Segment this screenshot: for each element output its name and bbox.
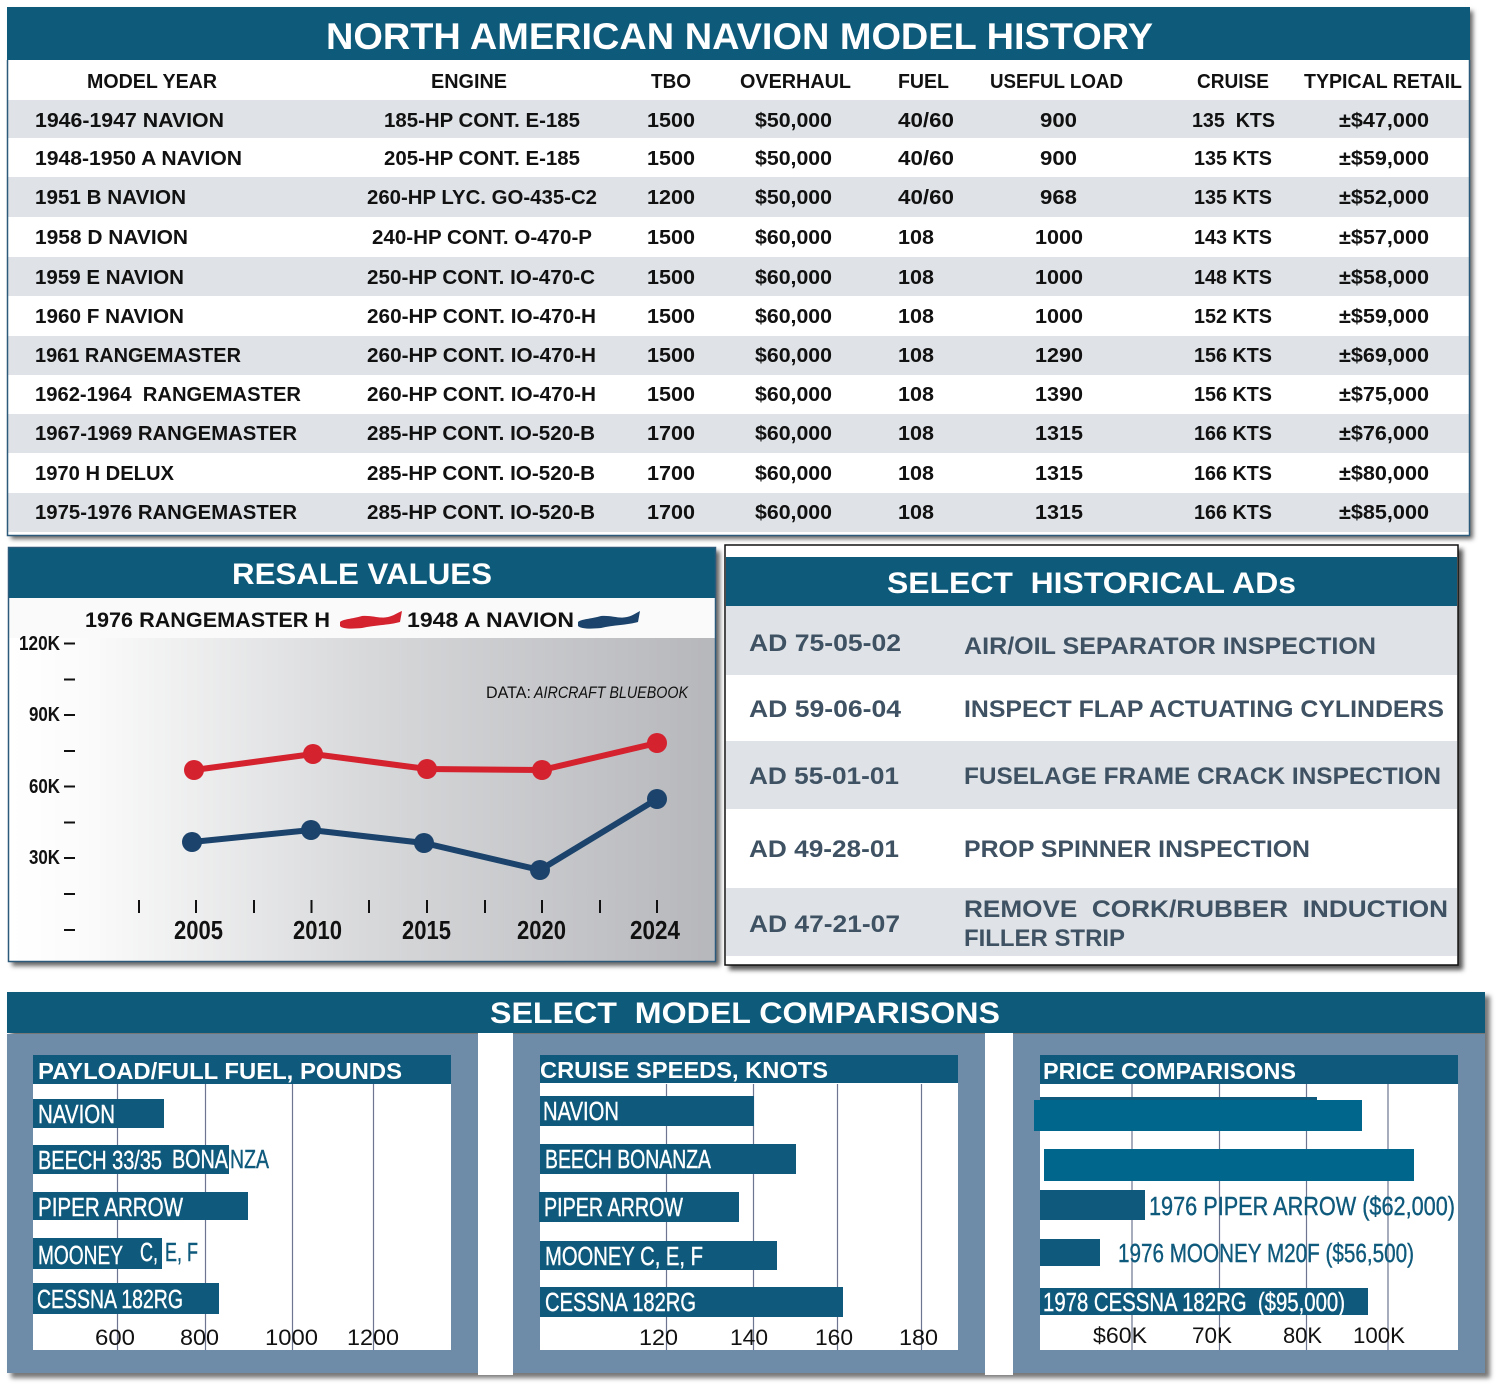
table row: 1951 B Navion: $50,000	[755, 186, 832, 209]
table row: 1946-1947 Navion	[8, 100, 1469, 138]
table row: 1962-1964 Rangemaster: $60,000	[755, 383, 832, 406]
table row: 1948-1950 A Navion: 1500	[647, 147, 695, 170]
cruise axis labels	[639, 1325, 938, 1350]
bar: 1976 Mooney M20F price	[1040, 1239, 1414, 1268]
table row: 1967-1969 Rangemaster: 285-HP CONT. IO-520-B	[367, 422, 595, 445]
table row: 1960 F Navion: 1500	[647, 305, 695, 328]
panel: price comparison chart	[1013, 1034, 1485, 1373]
panel: select historical ADs	[725, 545, 1463, 970]
data source note: DATA:	[486, 683, 531, 702]
panel: payload chart	[7, 1034, 478, 1373]
x axis: 2024	[630, 915, 680, 945]
payload axis labels: 600	[95, 1325, 135, 1350]
bar: Navion payload: NAVION	[38, 1101, 115, 1129]
resale values heading: RESALE VALUES	[232, 558, 492, 591]
bar: Beech Bonanza payload: BEECH 33/35	[38, 1147, 162, 1175]
bar: Mooney payload	[33, 1238, 198, 1270]
table row: 1946-1947 Navion: 900	[1040, 109, 1077, 132]
table row: 1970 H Delux: ±$80,000	[1339, 462, 1429, 485]
comparisons heading: SELECT MODEL COMPARISONS	[490, 997, 1000, 1030]
table row: 1951 B Navion	[8, 177, 1469, 217]
bar: Beech Bonanza payload: BONA	[172, 1146, 228, 1174]
cruise heading	[540, 1055, 958, 1083]
legend: 1976 RANGEMASTER H	[85, 609, 330, 632]
table row: 1970 H Delux: 1970 H DELUX	[35, 462, 174, 485]
panel: cruise speed chart	[513, 1034, 985, 1373]
table row: 1967-1969 Rangemaster: 108	[898, 422, 934, 445]
table row: 1958 D Navion: $60,000	[755, 226, 832, 249]
payload axis labels: 1000	[265, 1325, 318, 1350]
table row: 1959 E Navion: ±$58,000	[1339, 266, 1429, 289]
AD row: 75-05-02	[726, 606, 1457, 675]
AD row: 55-01-01	[726, 741, 1457, 809]
table row: 1959 E Navion: 250-HP CONT. IO-470-C	[367, 266, 595, 289]
table row: 1961 Rangemaster: ±$69,000	[1339, 344, 1429, 367]
table row: 1967-1969 Rangemaster: 1967-1969 RANGEMASTER	[35, 422, 297, 445]
table row: 1960 F Navion: 108	[898, 305, 934, 328]
table row: 1961 Rangemaster: 156 KTS	[1194, 344, 1272, 367]
table row: 1967-1969 Rangemaster: ±$76,000	[1339, 422, 1429, 445]
table column headers: ENGINE	[431, 70, 507, 93]
table row: 1960 F Navion: 1000	[1035, 305, 1083, 328]
table row: 1948-1950 A Navion: 135 KTS	[1194, 147, 1272, 170]
table row: 1958 D Navion: 1500	[647, 226, 695, 249]
bar: 1976 Piper Arrow price: 1976 PIPER ARROW ($62,000)	[1149, 1193, 1455, 1221]
AD row: 75-05-02: AIR/OIL SEPARATOR INSPECTION	[964, 633, 1376, 660]
table row: 1960 F Navion: $60,000	[755, 305, 832, 328]
bar: Cessna cruise: CESSNA 182RG	[545, 1289, 696, 1317]
table row: 1951 B Navion: 1200	[647, 186, 695, 209]
AD row: 49-28-01	[749, 836, 1310, 863]
table row: 1967-1969 Rangemaster: $60,000	[755, 422, 832, 445]
table row: 1970 H Delux: 108	[898, 462, 934, 485]
table row: 1961 Rangemaster: 108	[898, 344, 934, 367]
table row: 1951 B Navion: 135 KTS	[1194, 186, 1272, 209]
bar: 1976 Mooney M20F price: 1976 MOONEY M20F ($56,500)	[1118, 1240, 1414, 1268]
AD row: 49-28-01: AD 49-28-01	[749, 836, 899, 863]
x axis	[139, 900, 680, 945]
table row: 1948-1950 A Navion: $50,000	[755, 147, 832, 170]
title bar	[7, 7, 1470, 60]
table row: 1946-1947 Navion: 185-HP CONT. E-185	[384, 109, 580, 132]
table row: 1975-1976 Rangemaster: $60,000	[755, 501, 832, 524]
bar: 1978 Cessna 182RG price: 1978 CESSNA 182RG ($95,000)	[1043, 1289, 1345, 1317]
price axis labels	[1093, 1323, 1405, 1348]
table row: 1961 Rangemaster: 1961 RANGEMASTER	[35, 344, 241, 367]
table row: 1970 H Delux	[35, 462, 1429, 485]
comparisons heading	[7, 992, 1485, 1033]
table row: 1975-1976 Rangemaster: 166 KTS	[1194, 501, 1272, 524]
panel: model history table	[7, 7, 1473, 539]
table row: 1960 F Navion: 1960 F NAVION	[35, 305, 184, 328]
price axis labels: 70K	[1192, 1323, 1232, 1348]
table row: 1951 B Navion: 40/60	[898, 186, 954, 209]
section: select model comparisons	[7, 992, 1490, 1378]
table column headers: CRUISE	[1197, 70, 1269, 93]
AD row: 55-01-01: AD 55-01-01	[749, 763, 899, 790]
table row: 1961 Rangemaster: $60,000	[755, 344, 832, 367]
table row: 1960 F Navion: ±$59,000	[1339, 305, 1429, 328]
ADs heading: SELECT HISTORICAL ADs	[887, 567, 1296, 600]
table row: 1975-1976 Rangemaster: ±$85,000	[1339, 501, 1429, 524]
price heading: PRICE COMPARISONS	[1043, 1058, 1296, 1084]
table row: 1951 B Navion: ±$52,000	[1339, 186, 1429, 209]
table row: 1967-1969 Rangemaster: 1700	[647, 422, 695, 445]
table row: 1960 F Navion: 260-HP CONT. IO-470-H	[367, 305, 596, 328]
bar: Beech Bonanza payload	[33, 1145, 269, 1175]
table row: 1962-1964 Rangemaster: 156 KTS	[1194, 383, 1272, 406]
bar: Mooney payload: MOONEY	[38, 1242, 123, 1270]
table row: 1970 H Delux: $60,000	[755, 462, 832, 485]
x axis: 2005	[174, 915, 223, 945]
table row: 1946-1947 Navion: $50,000	[755, 109, 832, 132]
AD row: 49-28-01: PROP SPINNER INSPECTION	[964, 836, 1310, 863]
table row: 1975-1976 Rangemaster: 1700	[647, 501, 695, 524]
x axis: 2010	[293, 915, 342, 945]
AD row: 59-06-04	[749, 696, 1444, 723]
AD row: 59-06-04: AD 59-06-04	[749, 696, 902, 723]
y axis	[19, 633, 75, 930]
bar: Navion payload	[33, 1099, 164, 1129]
table row: 1967-1969 Rangemaster: 166 KTS	[1194, 422, 1272, 445]
resale values heading	[8, 547, 716, 598]
bar: 1976 Piper Arrow price	[1040, 1190, 1455, 1221]
table row: 1948-1950 A Navion: 40/60	[898, 147, 954, 170]
table row: 1958 D Navion: 108	[898, 226, 934, 249]
bar: Mooney payload: C,	[140, 1239, 158, 1267]
table row: 1958 D Navion: 143 KTS	[1194, 226, 1272, 249]
panel: resale values chart	[8, 547, 720, 966]
table row: 1958 D Navion: 1000	[1035, 226, 1083, 249]
table row: 1975-1976 Rangemaster	[8, 493, 1469, 532]
AD row: 47-21-07	[726, 888, 1457, 956]
table column headers: USEFUL LOAD	[990, 70, 1123, 93]
table row: 1958 D Navion: 1958 D NAVION	[35, 226, 188, 249]
table row: 1959 E Navion: 1000	[1035, 266, 1083, 289]
table row: 1948-1950 A Navion	[35, 147, 1429, 170]
payload axis labels: 1200	[347, 1325, 399, 1350]
table row: 1970 H Delux: 1315	[1035, 462, 1083, 485]
table row: 1951 B Navion: 968	[1040, 186, 1077, 209]
line: 1976 Rangemaster H	[184, 733, 667, 780]
table row: 1960 F Navion	[35, 305, 1429, 328]
bar: Piper Arrow payload: PIPER ARROW	[38, 1194, 183, 1222]
AD row: 47-21-07: REMOVE CORK/RUBBER INDUCTION	[964, 896, 1448, 923]
price axis labels: $60K	[1093, 1323, 1147, 1348]
table row: 1960 F Navion: 152 KTS	[1194, 305, 1272, 328]
bar: Mooney payload: E, F	[165, 1239, 198, 1267]
y axis: 30K	[29, 847, 60, 869]
AD row: 47-21-07: FILLER STRIP	[964, 925, 1125, 952]
AD row: 75-05-02: AD 75-05-02	[749, 630, 901, 657]
table row: 1961 Rangemaster: 1290	[1035, 344, 1083, 367]
table row: 1975-1976 Rangemaster: 285-HP CONT. IO-520-B	[367, 501, 595, 524]
bar: Mooney cruise: MOONEY C, E, F	[545, 1243, 703, 1271]
table row: 1959 E Navion: 1500	[647, 266, 695, 289]
table row: 1958 D Navion	[35, 226, 1429, 249]
table row: 1967-1969 Rangemaster: 1315	[1035, 422, 1083, 445]
payload heading: PAYLOAD/FULL FUEL, POUNDS	[38, 1058, 402, 1084]
table row: 1948-1950 A Navion: ±$59,000	[1339, 147, 1429, 170]
ADs heading	[726, 557, 1457, 606]
table row: 1967-1969 Rangemaster	[8, 414, 1469, 453]
AD row: 47-21-07: AD 47-21-07	[749, 911, 900, 938]
bar: Beech Bonanza payload: NZA	[230, 1146, 269, 1174]
table row: 1970 H Delux: 166 KTS	[1194, 462, 1272, 485]
cruise heading: CRUISE SPEEDS, KNOTS	[540, 1057, 828, 1083]
price axis labels: 80K	[1283, 1323, 1322, 1348]
cruise axis labels: 180	[899, 1325, 938, 1350]
price heading	[1040, 1055, 1458, 1084]
bar: Navion cruise	[540, 1096, 754, 1126]
title bar: NORTH AMERICAN NAVION MODEL HISTORY	[326, 16, 1153, 57]
table row: 1959 E Navion: $60,000	[755, 266, 832, 289]
cruise axis labels: 160	[815, 1325, 853, 1350]
table row: 1962-1964 Rangemaster	[35, 383, 1429, 406]
table column headers: FUEL	[898, 70, 949, 93]
bar: Navion cruise: NAVION	[543, 1098, 619, 1126]
table row: 1975-1976 Rangemaster: 1975-1976 RANGEMASTER	[35, 501, 297, 524]
table row: 1962-1964 Rangemaster: 1962-1964 RANGEMASTER	[35, 383, 301, 406]
table row: 1946-1947 Navion: 40/60	[898, 109, 954, 132]
table row: 1951 B Navion: 260-HP LYC. GO-435-C2	[367, 186, 597, 209]
table column headers: MODEL YEAR	[87, 70, 217, 93]
bar: second price bar (redacted)	[1044, 1149, 1414, 1181]
table column headers: TYPICAL RETAIL	[1304, 70, 1462, 93]
table row: 1959 E Navion	[8, 257, 1469, 296]
bar: Beech Bonanza cruise: BEECH BONANZA	[545, 1146, 711, 1174]
table row: 1961 Rangemaster: 260-HP CONT. IO-470-H	[367, 344, 596, 367]
bar: first price bar (redacted)	[1034, 1097, 1362, 1131]
table row: 1946-1947 Navion: 1500	[647, 109, 695, 132]
table row: 1958 D Navion: ±$57,000	[1339, 226, 1429, 249]
bar: Piper Arrow cruise: PIPER ARROW	[544, 1194, 683, 1222]
table row: 1962-1964 Rangemaster: 1390	[1035, 383, 1083, 406]
price axis labels: 100K	[1353, 1323, 1405, 1348]
table row: 1948-1950 A Navion: 205-HP CONT. E-185	[384, 147, 580, 170]
table row: 1962-1964 Rangemaster: 260-HP CONT. IO-470-H	[367, 383, 596, 406]
table column headers: OVERHAUL	[740, 70, 851, 93]
legend: 1948 A NAVION	[407, 609, 574, 632]
table row: 1962-1964 Rangemaster: 108	[898, 383, 934, 406]
bar: Cessna payload: CESSNA 182RG	[37, 1286, 183, 1314]
table row: 1946-1947 Navion: ±$47,000	[1339, 109, 1429, 132]
table row: 1970 H Delux: 1700	[647, 462, 695, 485]
legend	[85, 609, 640, 632]
cruise axis labels: 120	[639, 1325, 678, 1350]
data source note: AIRCRAFT BLUEBOOK	[533, 683, 689, 702]
table row: 1962-1964 Rangemaster: ±$75,000	[1339, 383, 1429, 406]
table row: 1951 B Navion: 1951 B NAVION	[35, 186, 186, 209]
table column headers	[87, 70, 1462, 93]
y axis: 90K	[29, 704, 60, 726]
table row: 1961 Rangemaster: 1500	[647, 344, 695, 367]
table row: 1946-1947 Navion: 135 KTS	[1192, 109, 1275, 132]
bar: Cessna cruise	[540, 1287, 843, 1317]
table row: 1962-1964 Rangemaster: 1500	[647, 383, 695, 406]
data source note	[486, 683, 689, 702]
x axis: 2015	[402, 915, 451, 945]
table row: 1961 Rangemaster	[8, 336, 1469, 375]
payload axis labels: 800	[180, 1325, 219, 1350]
y axis: 60K	[29, 776, 60, 798]
table row: 1948-1950 A Navion: 900	[1040, 147, 1077, 170]
table row: 1959 E Navion: 148 KTS	[1194, 266, 1272, 289]
table column headers: TBO	[651, 70, 691, 93]
table row: 1959 E Navion: 1959 E NAVION	[35, 266, 184, 289]
table row: 1959 E Navion: 108	[898, 266, 934, 289]
AD row: 59-06-04: INSPECT FLAP ACTUATING CYLINDERS	[964, 696, 1444, 723]
table row: 1975-1976 Rangemaster: 1315	[1035, 501, 1083, 524]
cruise axis labels: 140	[730, 1325, 768, 1350]
payload axis labels	[95, 1325, 399, 1350]
y axis: 120K	[19, 633, 60, 655]
table row: 1948-1950 A Navion: 1948-1950 A NAVION	[35, 147, 242, 170]
table row: 1958 D Navion: 240-HP CONT. O-470-P	[372, 226, 592, 249]
table row: 1975-1976 Rangemaster: 108	[898, 501, 934, 524]
table row: 1946-1947 Navion: 1946-1947 NAVION	[35, 109, 224, 132]
table row: 1970 H Delux: 285-HP CONT. IO-520-B	[367, 462, 595, 485]
x axis: 2020	[517, 915, 566, 945]
AD row: 55-01-01: FUSELAGE FRAME CRACK INSPECTION	[964, 763, 1441, 790]
line: 1948 A Navion	[182, 789, 667, 880]
